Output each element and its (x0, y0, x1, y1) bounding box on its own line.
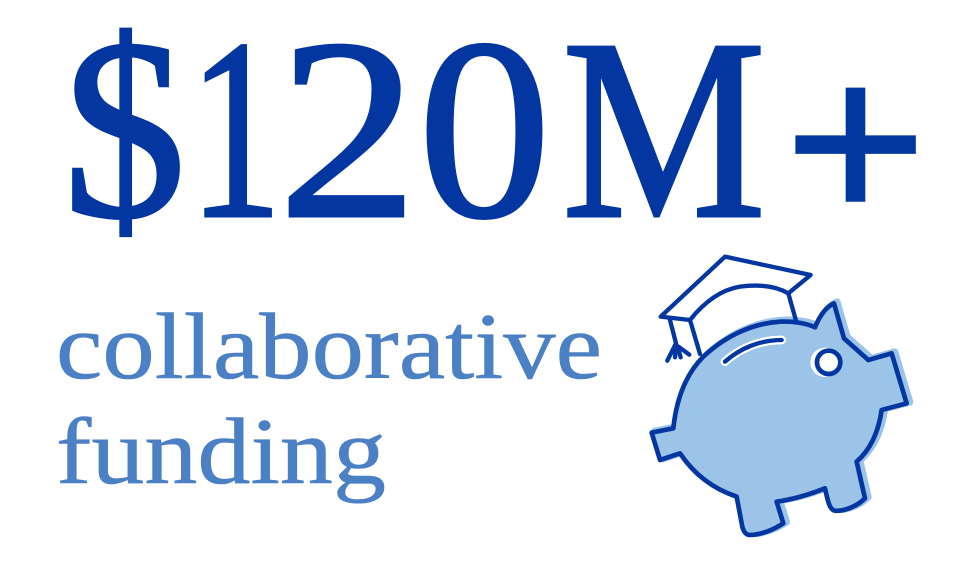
graduation cap (661, 257, 811, 361)
text: funding: funding (56, 400, 386, 504)
text: collaborative: collaborative (56, 295, 602, 399)
heading: $120M+: + (787, 16, 924, 271)
icon: piggy bank with graduation cap (652, 257, 910, 535)
coin slot (725, 340, 782, 362)
pig body (652, 303, 907, 535)
pig glow edge (655, 302, 910, 534)
heading: $120M+ (63, 0, 924, 272)
eye (810, 348, 840, 377)
